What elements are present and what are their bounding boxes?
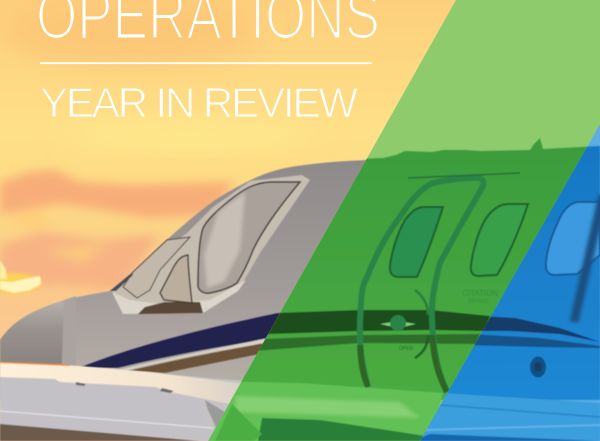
aircraft in green band: BRAVO	[468, 299, 489, 305]
blue cabin window	[546, 202, 600, 275]
stripes	[268, 310, 490, 335]
cabin stripe cream	[120, 338, 266, 370]
cockpit windows	[110, 175, 310, 314]
blue band over sky	[420, 124, 600, 441]
title divider	[40, 62, 372, 64]
door handle	[380, 290, 428, 358]
blue fuselage port	[530, 356, 546, 378]
wing	[0, 362, 245, 441]
green band over sky	[208, 0, 600, 441]
aircraft in blue band	[410, 146, 600, 441]
windshield edge	[110, 271, 134, 291]
wiper strut	[574, 195, 600, 322]
clouds	[0, 170, 235, 290]
cabin stripe brown	[130, 342, 263, 374]
window: side	[123, 237, 190, 298]
door warning label: OPEN	[399, 346, 414, 352]
aircraft in green band	[200, 138, 600, 441]
window: main	[198, 182, 300, 293]
door outline	[360, 178, 483, 392]
wing in green band	[200, 381, 443, 441]
sun glow	[0, 260, 42, 293]
subtitle: year in review: YEAR IN REVIEW	[40, 79, 358, 126]
aircraft fuselage	[0, 160, 366, 400]
blue stripes	[470, 316, 600, 342]
blue wing	[410, 393, 600, 441]
window: middle	[160, 255, 192, 303]
cabin stripe navy	[78, 312, 300, 368]
model label: CITATION	[462, 289, 498, 298]
door windows	[390, 207, 443, 277]
